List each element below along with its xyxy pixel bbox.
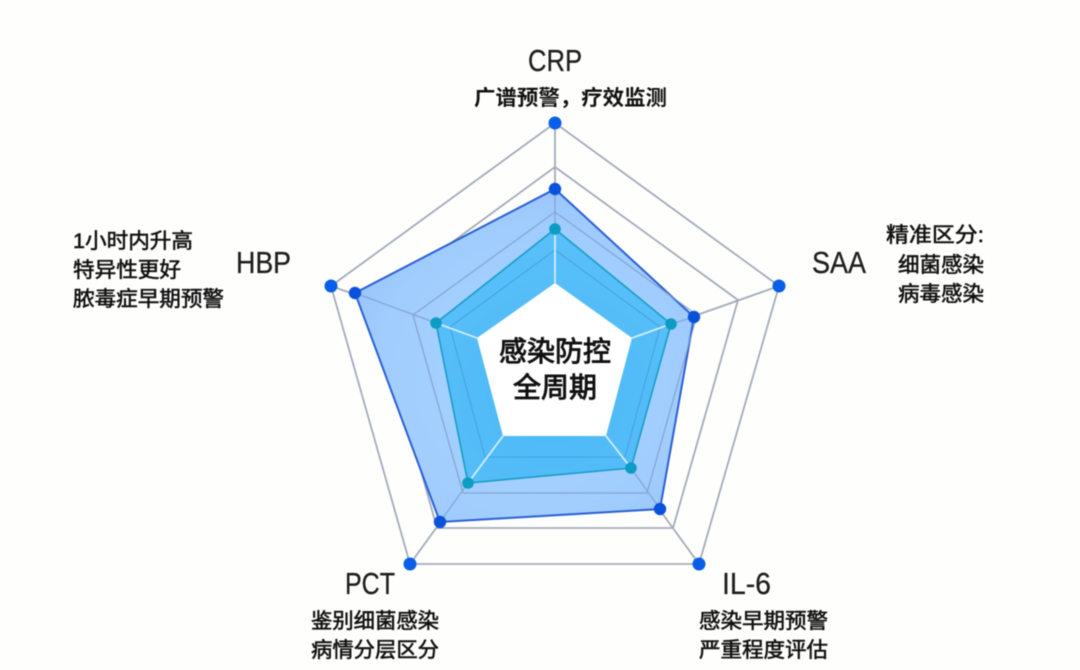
inner grid lines over outer area	[355, 189, 697, 522]
label: SAA: 细菌感染	[898, 254, 984, 277]
radar chart	[324, 116, 786, 570]
center pentagon	[477, 283, 632, 436]
center title: 感染防控	[499, 336, 611, 367]
label: IL-6	[699, 566, 828, 662]
label: PCT	[311, 566, 439, 662]
label: HBP: 脓毒症早期预警	[73, 288, 224, 311]
label: HBP: 1小时内升高	[73, 230, 193, 253]
label: HBP: HBP	[236, 245, 291, 280]
label: CRP: CRP	[528, 43, 582, 78]
center title: 全周期	[513, 372, 597, 403]
label: HBP: 特异性更好	[73, 259, 181, 282]
center title	[499, 336, 611, 403]
label: SAA: 病毒感染	[898, 283, 984, 306]
label: SAA: 精准区分:	[886, 224, 984, 247]
outer data dots	[349, 183, 700, 528]
inner spokes	[436, 229, 671, 483]
outer data area	[355, 189, 694, 522]
label: PCT: 病情分层区分	[311, 639, 439, 662]
label: SAA	[812, 224, 984, 306]
label: IL-6: IL-6	[722, 566, 771, 601]
inner data dots	[430, 223, 677, 489]
inner data area	[436, 229, 671, 483]
label: PCT: 鉴别细菌感染	[311, 610, 439, 633]
label: IL-6: 严重程度评估	[699, 639, 828, 662]
grid rings and spokes	[331, 123, 779, 564]
innermost grid ring	[450, 250, 660, 457]
label: IL-6: 感染早期预警	[699, 610, 828, 633]
label: CRP: 广谱预警，疗效监测	[474, 87, 667, 110]
outer axis dots	[324, 116, 786, 570]
label: SAA: SAA	[812, 245, 866, 280]
label: HBP	[73, 230, 291, 311]
label: PCT: PCT	[345, 566, 395, 601]
label: CRP	[474, 43, 667, 110]
